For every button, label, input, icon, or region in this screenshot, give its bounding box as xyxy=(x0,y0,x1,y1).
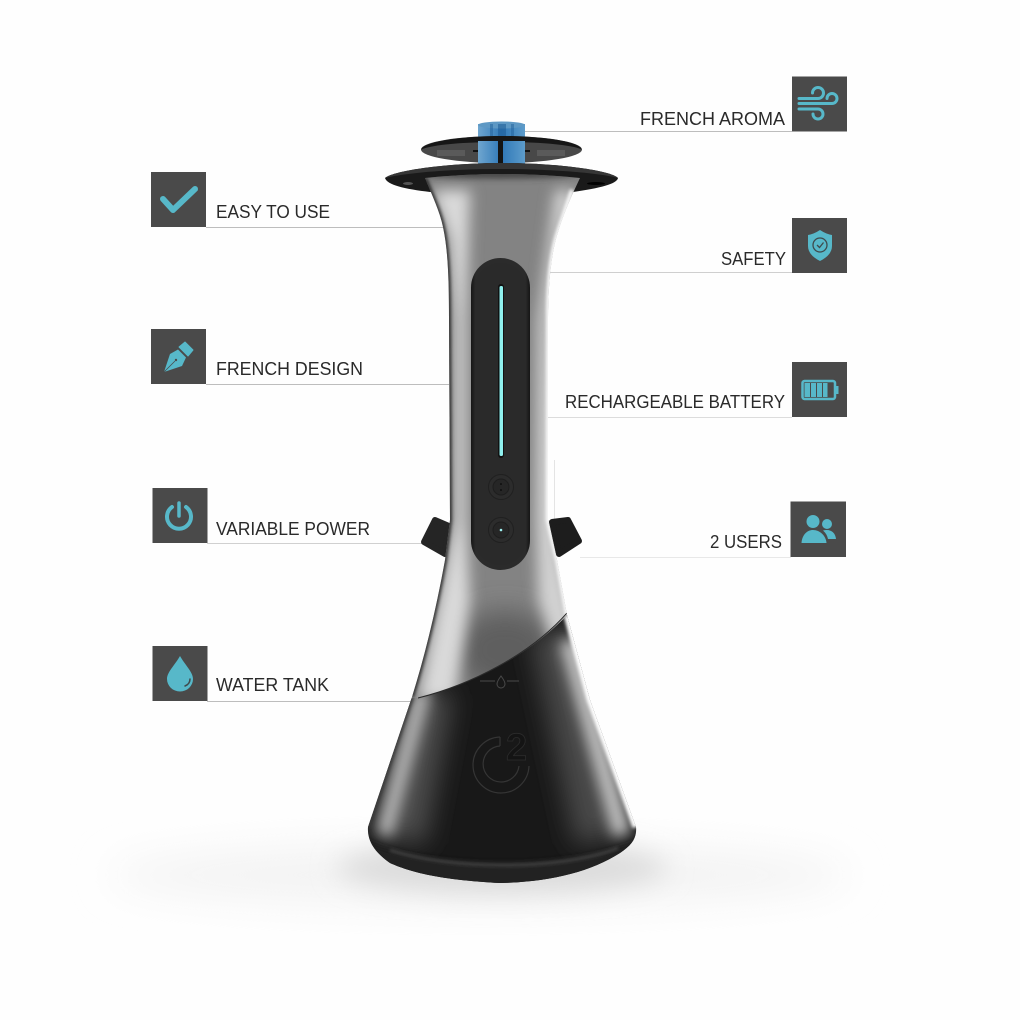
blue aroma cartridge xyxy=(478,122,525,164)
icon: check xyxy=(151,172,206,227)
product: G2 device xyxy=(360,122,650,900)
label: 2 USERS xyxy=(710,531,782,552)
button: bottom xyxy=(488,518,514,542)
callout: french aroma xyxy=(640,76,847,132)
tank water-drop mark xyxy=(480,676,519,688)
icon: fountain pen xyxy=(151,329,206,384)
label: SAFETY xyxy=(721,248,786,269)
label: RECHARGEABLE BATTERY xyxy=(565,391,785,412)
leader lines xyxy=(206,132,792,702)
side handles xyxy=(424,520,579,554)
label: FRENCH AROMA xyxy=(640,108,786,129)
callout: 2 users xyxy=(710,502,846,557)
callout: french design xyxy=(151,329,363,384)
upper metal shell xyxy=(412,174,580,698)
callout: safety xyxy=(721,218,847,273)
icon: battery xyxy=(792,362,847,417)
icon: power xyxy=(152,488,208,543)
control panel xyxy=(471,258,530,570)
G2 logo: 2 xyxy=(506,727,527,769)
callout: rechargeable battery xyxy=(565,362,847,417)
icon: wind xyxy=(792,76,847,132)
label: FRENCH DESIGN xyxy=(216,358,363,379)
lower disk xyxy=(385,163,618,192)
floor shadow xyxy=(110,842,850,905)
G2 logo xyxy=(473,727,529,793)
label: VARIABLE POWER xyxy=(216,518,370,539)
label: EASY TO USE xyxy=(216,201,330,222)
callout: easy to use xyxy=(151,172,330,227)
upper disk xyxy=(421,136,582,163)
label: WATER TANK xyxy=(216,674,330,695)
light strip xyxy=(498,284,504,458)
callout: water tank xyxy=(152,646,330,701)
icon: shield xyxy=(792,218,847,273)
callout: variable power xyxy=(152,488,370,543)
metallic body xyxy=(368,174,636,883)
icon: users xyxy=(790,502,846,557)
icon: water drop xyxy=(152,646,208,701)
button: top xyxy=(488,474,514,500)
lower dark tank xyxy=(368,615,636,883)
